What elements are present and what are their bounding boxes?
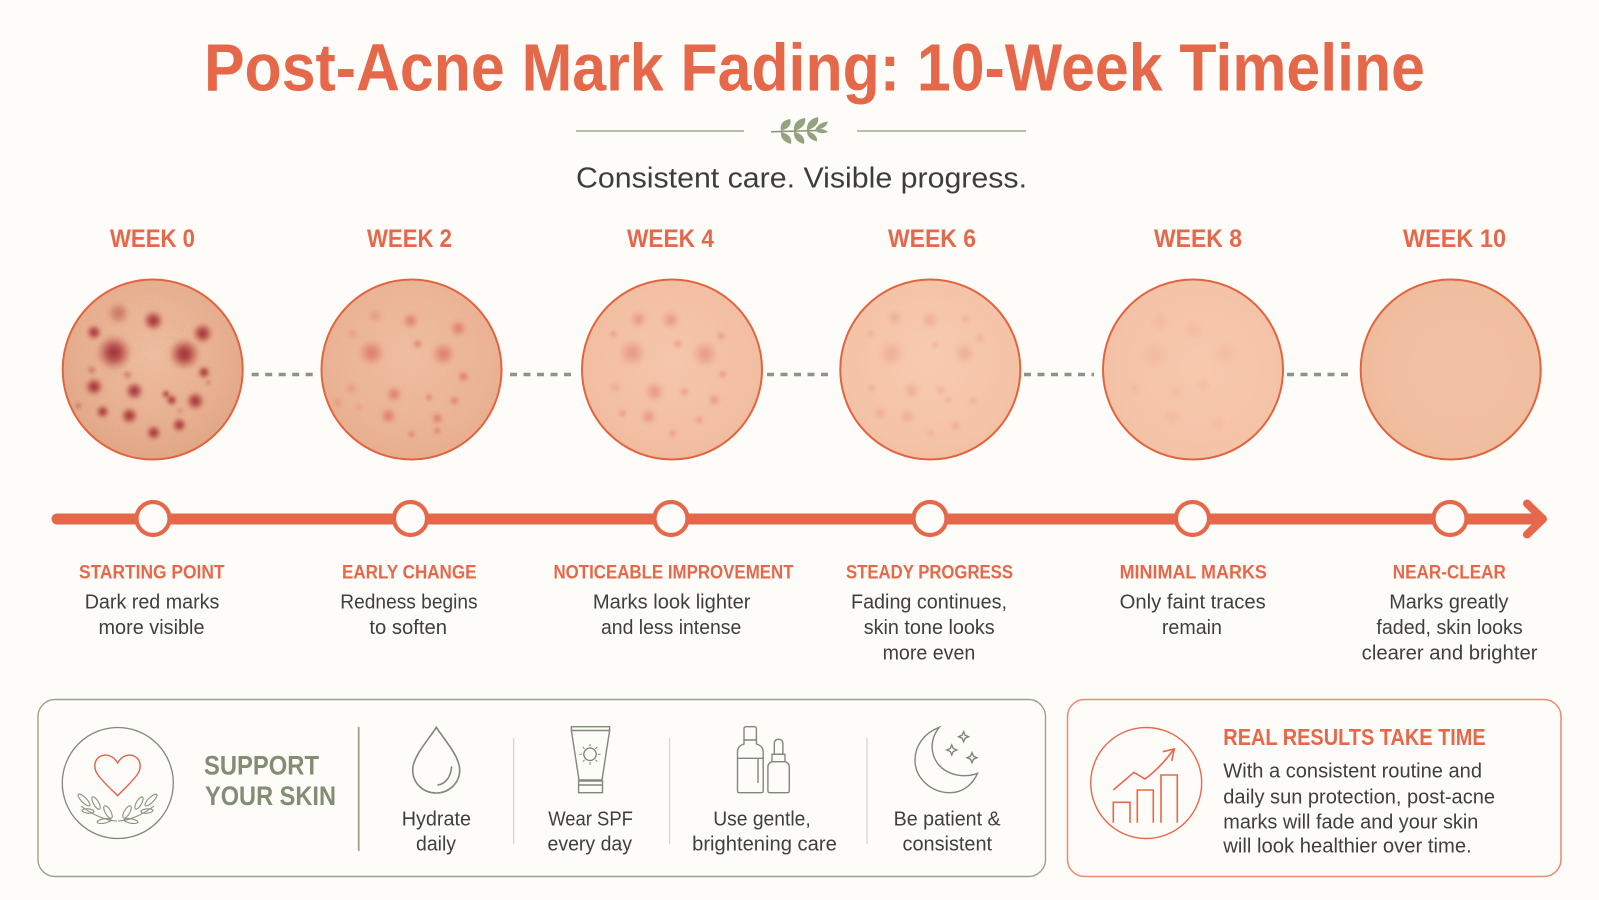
milestone: noticeable improvement: and less intense: [601, 617, 741, 639]
text: hydrate daily: [402, 809, 471, 856]
milestone: steady progress: [846, 562, 1013, 664]
milestone: near-clear: faded, skin looks: [1376, 617, 1523, 639]
milestone: steady progress: skin tone looks: [864, 617, 995, 639]
week labels: WEEK 2: [367, 225, 452, 253]
week labels: WEEK 10: [1403, 225, 1506, 253]
icon: leaf sprig divider: [576, 117, 1026, 144]
milestone: early change: Redness begins: [340, 592, 478, 614]
panel: support your skin: [38, 700, 1046, 876]
icon: rising bar chart: [1091, 728, 1202, 838]
text: be patient and consistent: Be patient &: [894, 809, 1001, 831]
heading: support your skin: SUPPORT: [204, 750, 319, 780]
skin photo: week 8: [1102, 278, 1284, 460]
heading: support your skin: [204, 750, 336, 811]
milestone: noticeable improvement: [554, 562, 794, 639]
milestone: minimal marks: MINIMAL MARKS: [1120, 562, 1267, 584]
milestone: near-clear: Marks greatly: [1389, 592, 1508, 614]
connector dots: week 6 to 8: [1024, 373, 1094, 376]
skin photo: week 4: [581, 278, 763, 462]
text: wear spf every day: Wear SPF: [548, 809, 633, 831]
milestone: noticeable improvement: Marks look lighter: [593, 592, 751, 614]
milestone: starting point: Dark red marks: [85, 592, 219, 614]
week labels: WEEK 6: [888, 225, 976, 253]
text: use gentle brightening care: [692, 809, 837, 856]
milestone: steady progress: more even: [883, 642, 975, 664]
text: wear spf every day: every day: [548, 834, 632, 856]
milestone: starting point: [79, 562, 225, 639]
connector dots: week 0 to 2: [252, 373, 313, 376]
milestone: steady progress: STEADY PROGRESS: [846, 562, 1013, 584]
text: results description: marks will fade and your skin: [1223, 811, 1478, 833]
icon: heart with laurel: [62, 728, 173, 838]
connector dots: week 2 to 4: [510, 373, 572, 376]
icon: sunscreen tube: [571, 727, 610, 793]
panel: real results take time: [1068, 700, 1561, 876]
skin photo: week 6: [839, 278, 1021, 460]
text: hydrate daily: Hydrate: [402, 809, 471, 831]
week labels: WEEK 4: [627, 225, 714, 253]
week labels: WEEK 0: [110, 225, 195, 253]
milestone: minimal marks: [1120, 562, 1267, 639]
milestone: noticeable improvement: NOTICEABLE IMPROVEMENT: [554, 562, 794, 584]
skin photo: week 0: [62, 278, 244, 462]
connector dots: week 4 to 6: [767, 373, 832, 376]
text: results description: With a consistent routine and: [1223, 761, 1482, 783]
text: results description: [1222, 761, 1495, 858]
icon: moon and stars: [915, 727, 978, 793]
milestone: near-clear: clearer and brighter: [1362, 642, 1538, 664]
text: be patient and consistent: consistent: [902, 834, 993, 856]
title: Post-Acne Mark Fading: 10-Week Timeline: [204, 30, 1425, 106]
connector dots: week 8 to 10: [1287, 373, 1353, 376]
milestone: early change: [340, 562, 478, 639]
heading: real results take time: REAL RESULTS TAKE TIME: [1223, 724, 1486, 750]
milestone: starting point: STARTING POINT: [79, 562, 225, 584]
milestone: near-clear: [1362, 562, 1538, 664]
text: be patient and consistent: [894, 809, 1001, 856]
icon: water drop: [413, 727, 460, 793]
text: wear spf every day: [548, 809, 633, 856]
timeline arrow with nodes: [57, 502, 1543, 535]
week labels: [110, 225, 1506, 253]
icon: serum bottles: [738, 727, 789, 793]
skin photo: week 10: [1360, 278, 1542, 460]
text: hydrate daily: daily: [416, 834, 456, 856]
subtitle: Consistent care. Visible progress.: [576, 162, 1027, 194]
week labels: WEEK 8: [1154, 225, 1242, 253]
milestone: near-clear: NEAR-CLEAR: [1393, 562, 1506, 584]
skin photo: week 2: [320, 278, 503, 462]
milestone: minimal marks: Only faint traces: [1120, 592, 1266, 614]
heading: support your skin: YOUR SKIN: [205, 781, 336, 811]
milestone: starting point: more visible: [98, 617, 204, 639]
text: use gentle brightening care: brightening care: [692, 834, 837, 856]
milestone: steady progress: Fading continues,: [851, 592, 1007, 614]
text: results description: will look healthier over time.: [1222, 836, 1472, 858]
milestone: minimal marks: remain: [1162, 617, 1222, 639]
text: results description: daily sun protection, post-acne: [1223, 786, 1495, 808]
text: use gentle brightening care: Use gentle,: [713, 809, 811, 831]
milestone: early change: to soften: [369, 617, 447, 639]
milestone: early change: EARLY CHANGE: [342, 562, 476, 584]
